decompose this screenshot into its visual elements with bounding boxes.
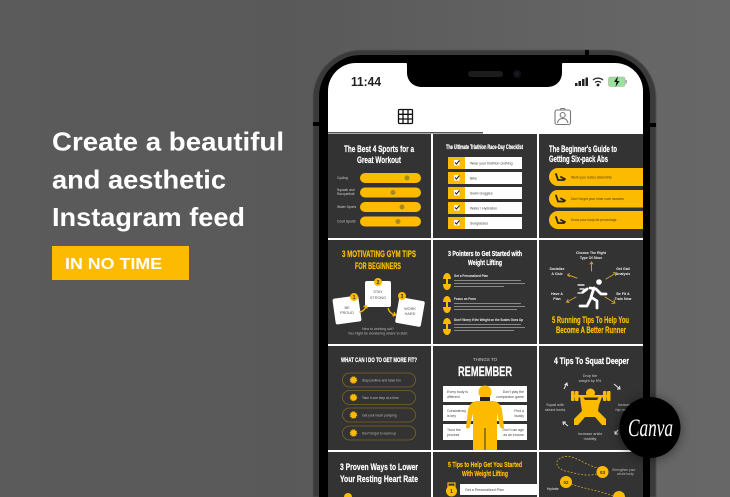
route stops (560, 466, 625, 497)
note rows: process (447, 433, 460, 437)
icon: badge (344, 493, 352, 497)
icon: kettlebell: 1 (450, 489, 453, 495)
spoke labels: Train Now (615, 297, 632, 301)
post: route map (547, 456, 636, 497)
phone (313, 50, 659, 497)
post: route map: 02 (563, 480, 569, 485)
note rows: Don't use age (502, 428, 524, 432)
canva badge (618, 397, 682, 461)
tip cards: STAY (373, 290, 383, 294)
outlined tip pills: Take it one step at a time (362, 396, 399, 400)
post: weight lifting tips (446, 460, 537, 496)
post title: 5 Running Tips To Help You (552, 315, 629, 325)
tip cards: WORK (404, 307, 416, 311)
post: resting heart rate (340, 462, 418, 497)
outlined tip pills (342, 373, 416, 440)
slider rows: Cycling (337, 176, 348, 180)
note rows: Consistency (447, 409, 466, 413)
outlined tip pills: Don't forget to warm up (362, 432, 396, 436)
post title: REMEMBER (458, 363, 512, 379)
post: weight lifting pointers (443, 249, 525, 335)
dumbbell icons (443, 273, 451, 335)
headline: and aesthetic (52, 164, 226, 194)
note rows: comparison game (496, 395, 524, 399)
tip cards: HARD (405, 312, 416, 316)
post title: THINGS TO (473, 357, 498, 362)
caption: New to working out? (362, 327, 394, 331)
spoke labels: Have A (551, 292, 563, 296)
post title (552, 316, 629, 334)
slider rows: Racquetball (337, 192, 355, 196)
post title: With Weight Lifting (462, 469, 508, 478)
post title: 3 Proven Ways to Lower (340, 462, 418, 473)
icon: tagged tab (555, 108, 570, 124)
post title: 3 Pointers to Get Started with (448, 249, 522, 258)
spoke labels: A Club (551, 272, 563, 276)
squat labels: mobility (584, 437, 597, 441)
post title: Getting Six-pack Abs (549, 154, 608, 164)
route labels: Strengthen your (612, 468, 636, 472)
post: six-pack abs (549, 145, 643, 229)
post title: The Best 4 Sports for a (344, 144, 414, 155)
route labels: Hydrate (547, 487, 559, 491)
runner icon (578, 279, 606, 308)
post title: 4 Tips To Squat Deeper (554, 356, 629, 366)
note rows: is key (447, 414, 456, 418)
tip pills (549, 168, 643, 229)
tip cards: STRONG (370, 296, 386, 300)
icon: grid tab (398, 110, 412, 124)
pointer text (454, 274, 525, 331)
tab bar (328, 108, 570, 134)
post: things to remember (443, 357, 527, 450)
tip cards: PROUD (340, 311, 354, 315)
tip pills: Don't forget your inner core muscles (571, 197, 624, 201)
tip cards: 2 (377, 280, 380, 286)
checklist: Swim Goggles (470, 192, 493, 196)
post title (342, 250, 416, 270)
post: triathlon checklist (446, 145, 523, 229)
post: best 4 sports (337, 144, 421, 226)
badge: in no time: IN NO TIME (65, 256, 162, 273)
headline (52, 126, 284, 232)
spoke labels: Get Gait (616, 267, 631, 271)
slider rows: Squash and (337, 188, 355, 192)
post: squat tips (545, 356, 635, 441)
tip pills: Know your body fat percentage (571, 218, 617, 222)
squat labels: Increase (618, 403, 632, 407)
checklist: Sunglasses (470, 222, 488, 226)
note rows: buddy (514, 414, 524, 418)
post title: Become A Better Runner (556, 325, 626, 335)
caption: You might be wondering where to start. (348, 332, 408, 336)
slider rows: Court Sports (337, 220, 356, 224)
dotted route (557, 456, 613, 496)
checklist: Wear your triathlon clothing (470, 162, 513, 166)
icon: wifi (593, 78, 603, 86)
route labels: whole body (617, 472, 634, 476)
post: gym tips (332, 249, 425, 336)
clock: 11:44 (351, 74, 382, 89)
phone body (313, 50, 656, 497)
squat icon (571, 388, 610, 425)
post: route map: 03 (600, 470, 605, 475)
icon: battery (608, 76, 627, 87)
spoke labels: Type Of Shoe (580, 256, 602, 260)
pointer text: Get a Personalized Plan (454, 274, 489, 278)
arrows (563, 383, 620, 434)
tip pills: Work your rectus abdominis (571, 176, 612, 180)
post title: 3 MOTIVATING GYM TIPS (342, 249, 416, 260)
outlined tip pills: Stay positive and have fun (362, 378, 401, 382)
route labels (547, 468, 636, 491)
post title (549, 144, 617, 164)
phone screen (328, 63, 659, 497)
post: get more fit (341, 357, 417, 440)
spoke labels: Socialize (550, 267, 565, 271)
post title: FOR BEGINNERS (355, 261, 401, 272)
squat labels: Drop the (583, 374, 597, 378)
tip cards: 3 (401, 294, 404, 300)
note rows: different (447, 395, 460, 399)
arrows (566, 262, 616, 304)
tip cards (332, 278, 425, 327)
note rows: Every body is (447, 390, 468, 394)
spoke labels: Choose The Right (576, 251, 607, 255)
note rows: as an excuse (503, 433, 524, 437)
note rows: Don't play the (503, 390, 524, 394)
post title: The Ultimate Triathlon Race-Day Checklist (446, 145, 523, 151)
person figure (466, 386, 504, 450)
note rows: Find a (514, 409, 524, 413)
post title: The Beginner's Guide to (549, 144, 617, 154)
checklist (448, 157, 522, 229)
squat labels: Increase ankle (578, 432, 602, 436)
spoke labels: Plan (553, 297, 561, 301)
squat labels: raised heels (545, 408, 565, 412)
canva badge: Canva (628, 415, 673, 442)
post title: Weight Lifting (468, 258, 502, 267)
outlined tip pills: Get your heart pumping (362, 414, 397, 418)
cell backgrounds (328, 134, 643, 497)
post title (458, 358, 512, 376)
squat labels: weight by 5% (579, 379, 602, 383)
badge: in no time (52, 246, 189, 280)
caption (348, 327, 408, 336)
tip cards: 1 (353, 295, 356, 301)
spoke labels: Analysis (616, 272, 630, 276)
pointer text: Focus on Form (454, 297, 477, 301)
post title: Great Workout (357, 155, 402, 166)
note rows: Trust the (447, 428, 461, 432)
squat labels: hip mobility (616, 408, 635, 412)
squat labels: Squat with (546, 403, 564, 407)
status bar (351, 74, 627, 89)
slider rows (337, 173, 421, 226)
plan row: Get a Personalized Plan (465, 488, 504, 492)
squat labels (545, 374, 635, 441)
icon: signal (575, 78, 588, 86)
tip cards: BE (344, 306, 350, 310)
spoke labels: Be Fit & (616, 292, 630, 296)
spoke labels (550, 251, 632, 301)
post title (344, 145, 414, 164)
checklist: Water / Hydration (470, 206, 497, 210)
post title: 5 Tips to Help Get You Started (448, 460, 522, 469)
post: running tips (550, 251, 632, 335)
slider rows: Water Sports (337, 205, 356, 209)
post title: Your Resting Heart Rate (340, 474, 418, 485)
post title (448, 460, 522, 478)
note rows (443, 386, 527, 440)
headline: Instagram feed (52, 202, 245, 232)
post title (340, 462, 418, 485)
phone notch (402, 60, 567, 87)
headline: Create a beautiful (52, 126, 284, 156)
post title: WHAT CAN I DO TO GET MORE FIT? (341, 357, 417, 364)
checklist: Bike (470, 176, 477, 180)
post title (448, 249, 522, 267)
pointer text: Don't Worry If the Weight on the Scales Goes Up (454, 318, 524, 322)
